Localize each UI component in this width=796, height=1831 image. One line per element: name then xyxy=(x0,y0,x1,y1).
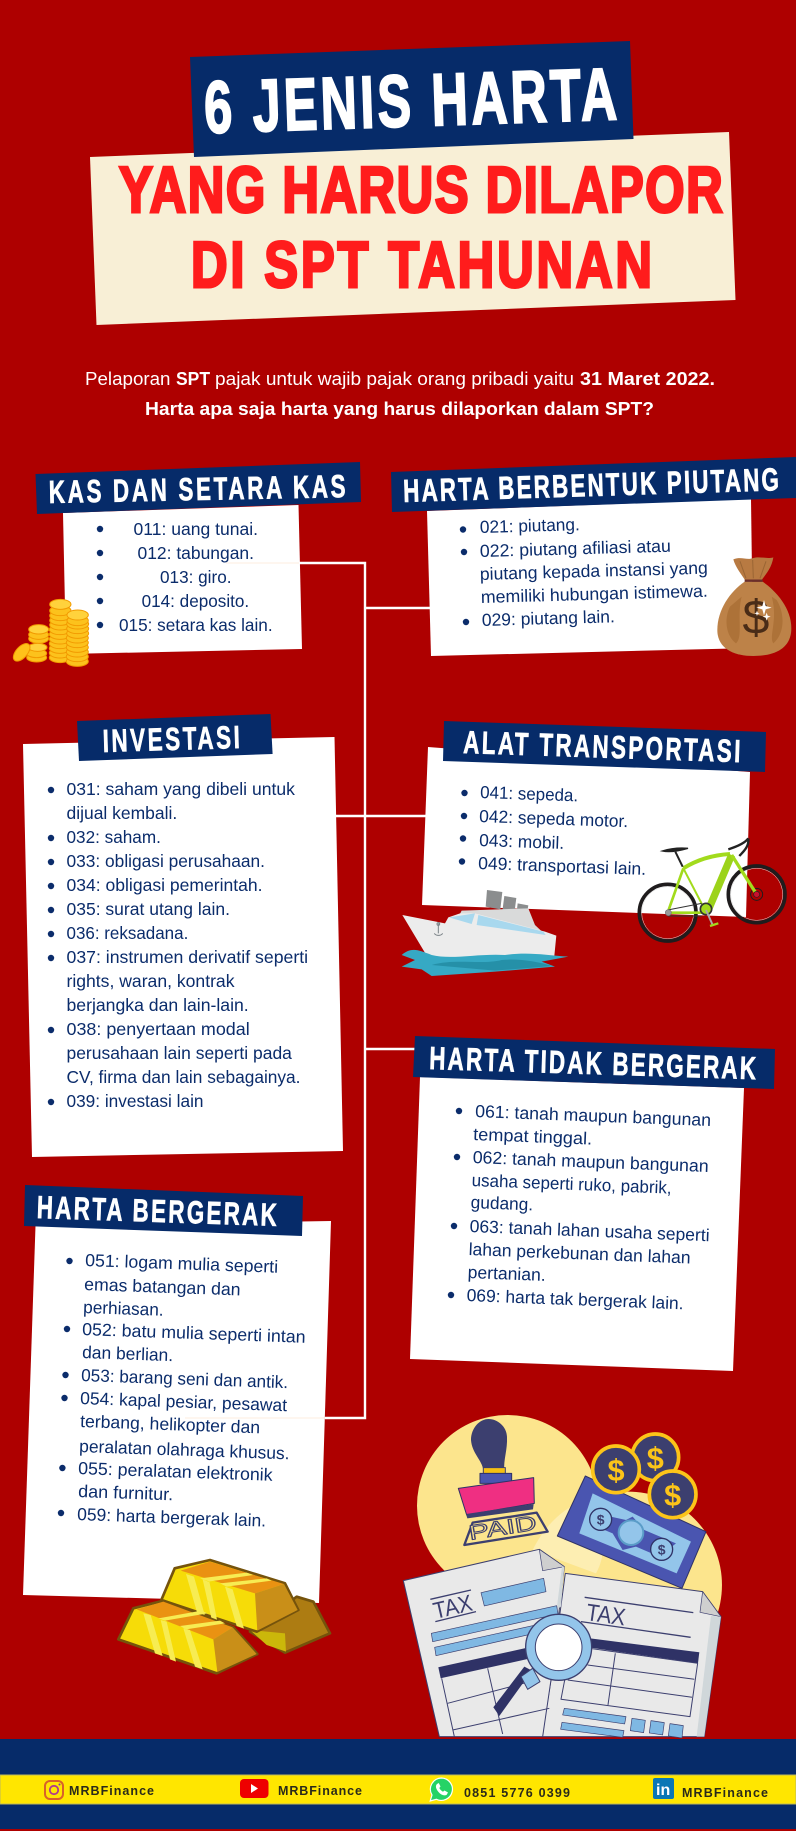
document: left tax form xyxy=(403,1549,564,1737)
list: investasi items: 037: instrumen derivatif seperti xyxy=(66,947,308,967)
icon: banknote and coins: $ xyxy=(658,1541,666,1557)
connector lines xyxy=(185,563,430,1418)
icon: linkedin: in xyxy=(656,1782,670,1799)
panel: kas dan setara kas card xyxy=(63,505,302,654)
list: harta bergerak items: 053: barang seni dan antik. xyxy=(81,1365,288,1392)
list: piutang items: 022: piutang afiliasi atau xyxy=(480,536,671,561)
section: alat transportasi xyxy=(443,721,766,879)
text: linkedin handle: MRBFinance xyxy=(682,1786,768,1800)
list: harta bergerak items: 054: kapal pesiar, pesawat xyxy=(80,1388,288,1415)
list: investasi items: berjangka dan lain-lain. xyxy=(66,995,249,1015)
list: piutang items: memiliki hubungan istimewa. xyxy=(481,581,708,607)
list: transportasi items: 042: sepeda motor. xyxy=(479,806,628,831)
heading: harta bergerak: HARTA BERGERAK xyxy=(36,1189,277,1233)
list: tidak bergerak items: pertanian. xyxy=(467,1262,546,1285)
list: harta bergerak items: dan berlian. xyxy=(82,1342,174,1365)
list: tidak bergerak items: 062: tanah maupun bangunan xyxy=(472,1147,709,1176)
title line: di spt tahunan: DI SPT TAHUNAN xyxy=(191,229,652,301)
icon: banknote and coins: $ xyxy=(607,1453,625,1487)
list: tidak bergerak items: 061: tanah maupun bangunan xyxy=(475,1101,711,1130)
list: kas items: 012: tabungan. xyxy=(138,543,254,563)
list: tidak bergerak items xyxy=(448,1101,711,1313)
icon: whatsapp xyxy=(430,1778,452,1801)
list: investasi items: perusahaan lain seperti pada xyxy=(66,1043,292,1063)
list: investasi items: 038: penyertaan modal xyxy=(66,1019,250,1039)
list: investasi items: 039: investasi lain xyxy=(66,1091,204,1111)
document: left tax form: TAX xyxy=(431,1590,475,1624)
panel: investasi card xyxy=(23,737,343,1157)
text: youtube handle: MRBFinance xyxy=(278,1784,362,1798)
list: kas items: 014: deposito. xyxy=(142,591,249,611)
icon: gold bars xyxy=(118,1560,330,1673)
heading: harta berbentuk piutang: HARTA BERBENTUK PIUTANG xyxy=(403,461,779,509)
list: piutang items xyxy=(460,514,708,630)
list: investasi items: 035: surat utang lain. xyxy=(66,899,230,919)
list: kas items: 013: giro. xyxy=(160,567,232,587)
list: tidak bergerak items: usaha seperti ruko, pabrik, xyxy=(471,1170,672,1198)
icon: banknote and coins xyxy=(557,1434,706,1588)
list: investasi items: 036: reksadana. xyxy=(66,923,188,943)
intro text xyxy=(85,369,715,419)
heading: kas dan setara kas: KAS DAN SETARA KAS xyxy=(48,468,346,510)
list: investasi items: 034: obligasi pemerintah. xyxy=(66,875,262,895)
list: piutang items: piutang kepada instansi yang xyxy=(480,558,708,584)
icon: paid stamp: PAID xyxy=(467,1512,538,1545)
list: transportasi items xyxy=(459,782,646,879)
list: piutang items: 021: piutang. xyxy=(480,514,580,537)
list: piutang items: 029: piutang lain. xyxy=(482,606,615,630)
section: harta tidak bergerak xyxy=(413,1036,775,1313)
intro text: pajak untuk wajib pajak orang pribadi yaitu xyxy=(215,369,574,389)
illustration: tax documents, stamp, money xyxy=(403,1415,722,1738)
list: harta bergerak items: 055: peralatan elektronik xyxy=(78,1458,273,1485)
panel: harta bergerak card xyxy=(23,1221,331,1603)
intro text: Harta apa saja harta yang harus dilaporkan dalam SPT? xyxy=(145,399,654,419)
list: harta bergerak items: dan furnitur. xyxy=(78,1481,174,1504)
icon: linkedin xyxy=(653,1778,674,1799)
intro text: Pelaporan xyxy=(85,369,170,389)
text: whatsapp number: 0851 5776 0399 xyxy=(464,1786,570,1800)
panel: harta berbentuk piutang card xyxy=(427,499,753,656)
list: tidak bergerak items: 063: tanah lahan usaha seperti xyxy=(469,1216,710,1245)
list: harta bergerak items: perhiasan. xyxy=(83,1297,164,1320)
icon: magnifying glass xyxy=(493,1614,592,1716)
icon: money bag: $ xyxy=(743,590,770,644)
heading: investasi: INVESTASI xyxy=(102,719,240,759)
panel: harta tidak bergerak card xyxy=(410,1077,744,1371)
heading: investasi xyxy=(77,714,273,761)
document: right tax form xyxy=(542,1573,721,1738)
section: kas dan setara kas xyxy=(36,462,361,635)
intro text: SPT xyxy=(176,369,210,389)
list: investasi items: CV, firma dan lain sebagainya. xyxy=(66,1067,300,1087)
text: instagram handle: MRBFinance xyxy=(69,1784,154,1798)
footer bar xyxy=(0,1739,796,1829)
icon: paid stamp xyxy=(458,1419,548,1545)
icon: youtube xyxy=(240,1779,268,1798)
list: harta bergerak items: 059: harta bergerak lain. xyxy=(77,1504,266,1531)
title line: yang harus dilapor: YANG HARUS DILAPOR xyxy=(119,154,723,226)
heading: harta tidak bergerak: HARTA TIDAK BERGERAK xyxy=(429,1040,757,1086)
title background: cream xyxy=(90,132,736,325)
list: harta bergerak items xyxy=(58,1250,306,1531)
list: kas items: 011: uang tunai. xyxy=(134,519,258,539)
section: investasi xyxy=(48,714,308,1111)
panel: title block xyxy=(90,41,736,325)
title line: 6 jenis harta: 6 JENIS HARTA xyxy=(203,54,618,149)
icon: banknote and coins: $ xyxy=(647,1441,664,1475)
icon: instagram xyxy=(45,1781,63,1799)
list: kas items: 015: setara kas lain. xyxy=(119,615,273,635)
list: harta bergerak items: peralatan olahraga khusus. xyxy=(79,1436,290,1463)
list: tidak bergerak items: tempat tinggal. xyxy=(473,1124,593,1149)
list: tidak bergerak items: gudang. xyxy=(470,1192,534,1214)
document: right tax form: TAX xyxy=(584,1599,627,1631)
icon: banknote and coins: $ xyxy=(664,1478,681,1512)
list: kas items xyxy=(97,519,273,635)
icon: cruise ship xyxy=(402,890,568,976)
heading: alat transportasi: ALAT TRANSPORTASI xyxy=(463,724,741,769)
panel: alat transportasi card xyxy=(422,747,750,917)
list: transportasi items: 049: transportasi lain. xyxy=(478,853,646,879)
icon: banknote and coins: $ xyxy=(597,1511,605,1527)
list: harta bergerak items: 051: logam mulia seperti xyxy=(85,1250,278,1277)
yellow background blobs xyxy=(417,1415,722,1678)
list: investasi items: rights, waran, kontrak xyxy=(66,971,235,991)
icon: bicycle xyxy=(639,838,785,941)
list: transportasi items: 043: mobil. xyxy=(479,830,565,853)
list: investasi items xyxy=(48,779,308,1111)
section: harta berbentuk piutang xyxy=(391,457,796,630)
icon: money bag xyxy=(717,557,791,656)
list: harta bergerak items: terbang, helikopter dan xyxy=(80,1411,260,1437)
list: investasi items: 031: saham yang dibeli untuk xyxy=(66,779,295,799)
list: investasi items: 032: saham. xyxy=(66,827,161,847)
intro text: 31 Maret 2022. xyxy=(580,369,715,389)
list: tidak bergerak items: lahan perkebunan dan lahan xyxy=(468,1239,691,1268)
section: harta bergerak xyxy=(24,1185,306,1531)
list: investasi items: dijual kembali. xyxy=(66,803,177,823)
list: tidak bergerak items: 069: harta tak bergerak lain. xyxy=(466,1285,684,1313)
title background: navy xyxy=(190,41,634,157)
list: transportasi items: 041: sepeda. xyxy=(480,782,578,805)
list: harta bergerak items: 052: batu mulia seperti intan xyxy=(82,1319,306,1347)
list: harta bergerak items: emas batangan dan xyxy=(84,1274,241,1299)
list: investasi items: 033: obligasi perusahaan. xyxy=(66,851,265,871)
icon: gold coin stacks xyxy=(10,599,89,666)
